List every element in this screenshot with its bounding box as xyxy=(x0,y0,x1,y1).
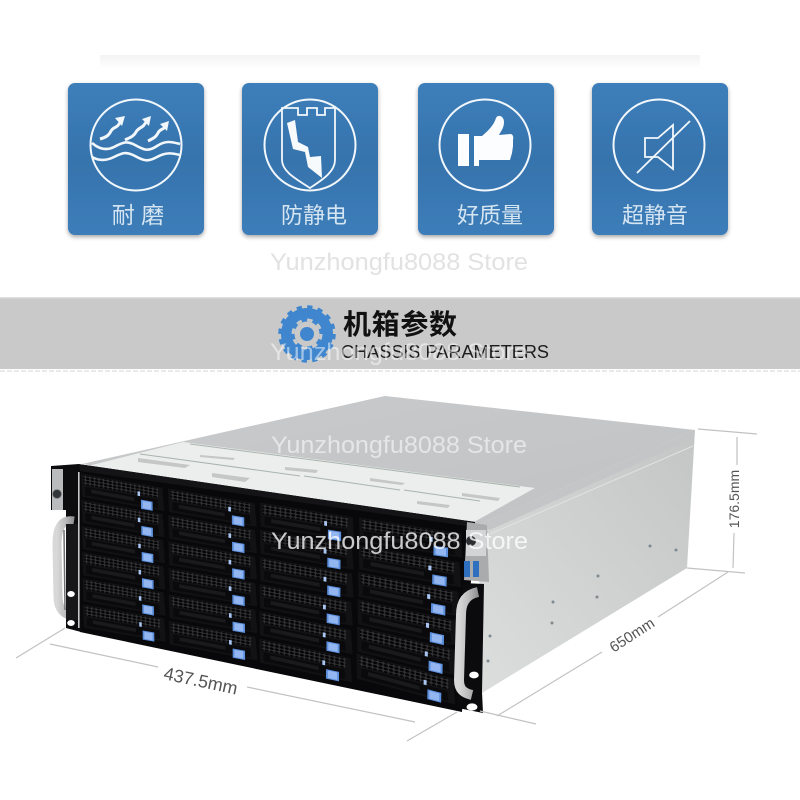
watermark: Yunzhongfu8088 Store xyxy=(270,249,528,276)
feature card: anti-static xyxy=(242,83,378,235)
section banner: chassis parameters xyxy=(0,297,800,371)
drive bays column 1 xyxy=(81,474,166,644)
drive bays column 4 xyxy=(356,518,463,706)
dimension: width 437.5mm: 437.5mm xyxy=(162,663,240,699)
icon: thumbs up xyxy=(458,116,513,166)
dimension: height 176.5mm: 176.5mm xyxy=(726,470,742,528)
section banner: chassis parameters: CHASSIS PARAMETERS xyxy=(341,342,549,362)
chassis side panel xyxy=(478,430,695,693)
dimension: height 176.5mm xyxy=(687,429,757,573)
icon: blue gear xyxy=(280,307,334,361)
feature card: wear resistant xyxy=(68,83,204,235)
top label sticker xyxy=(88,442,535,522)
icon: waves and arrows xyxy=(92,116,180,160)
right rack ear and handle xyxy=(458,522,489,713)
front panel background xyxy=(78,464,475,712)
left rack ear and handle xyxy=(51,464,81,632)
dimension: width 437.5mm xyxy=(16,628,457,741)
drive bays column 2 xyxy=(168,489,257,662)
feature card: wear resistant: 耐 磨 xyxy=(112,202,164,228)
chassis top panel xyxy=(82,396,695,525)
icon: muted speaker xyxy=(637,121,690,173)
server chassis xyxy=(51,396,695,713)
feature card: good quality xyxy=(418,83,554,235)
feature card: anti-static: 防静电 xyxy=(281,203,347,228)
feature card: ultra quiet xyxy=(592,83,728,235)
icon: shield with lightning bolt xyxy=(282,108,335,188)
watermark on top panel: Yunzhongfu8088 Store xyxy=(271,432,527,459)
drive bays column 3 xyxy=(259,503,354,684)
section banner: chassis parameters: 机箱参数 xyxy=(343,309,457,340)
top fade band xyxy=(100,55,700,69)
feature card: good quality: 好质量 xyxy=(457,203,523,228)
feature card: ultra quiet: 超静音 xyxy=(622,203,688,228)
dimension: depth 650mm: 650mm xyxy=(607,615,658,656)
dimension: depth 650mm xyxy=(480,572,728,724)
section banner: chassis parameters: Yunzhongfu8088 Store xyxy=(270,339,528,366)
watermark on front panel: Yunzhongfu8088 Store xyxy=(271,528,528,555)
